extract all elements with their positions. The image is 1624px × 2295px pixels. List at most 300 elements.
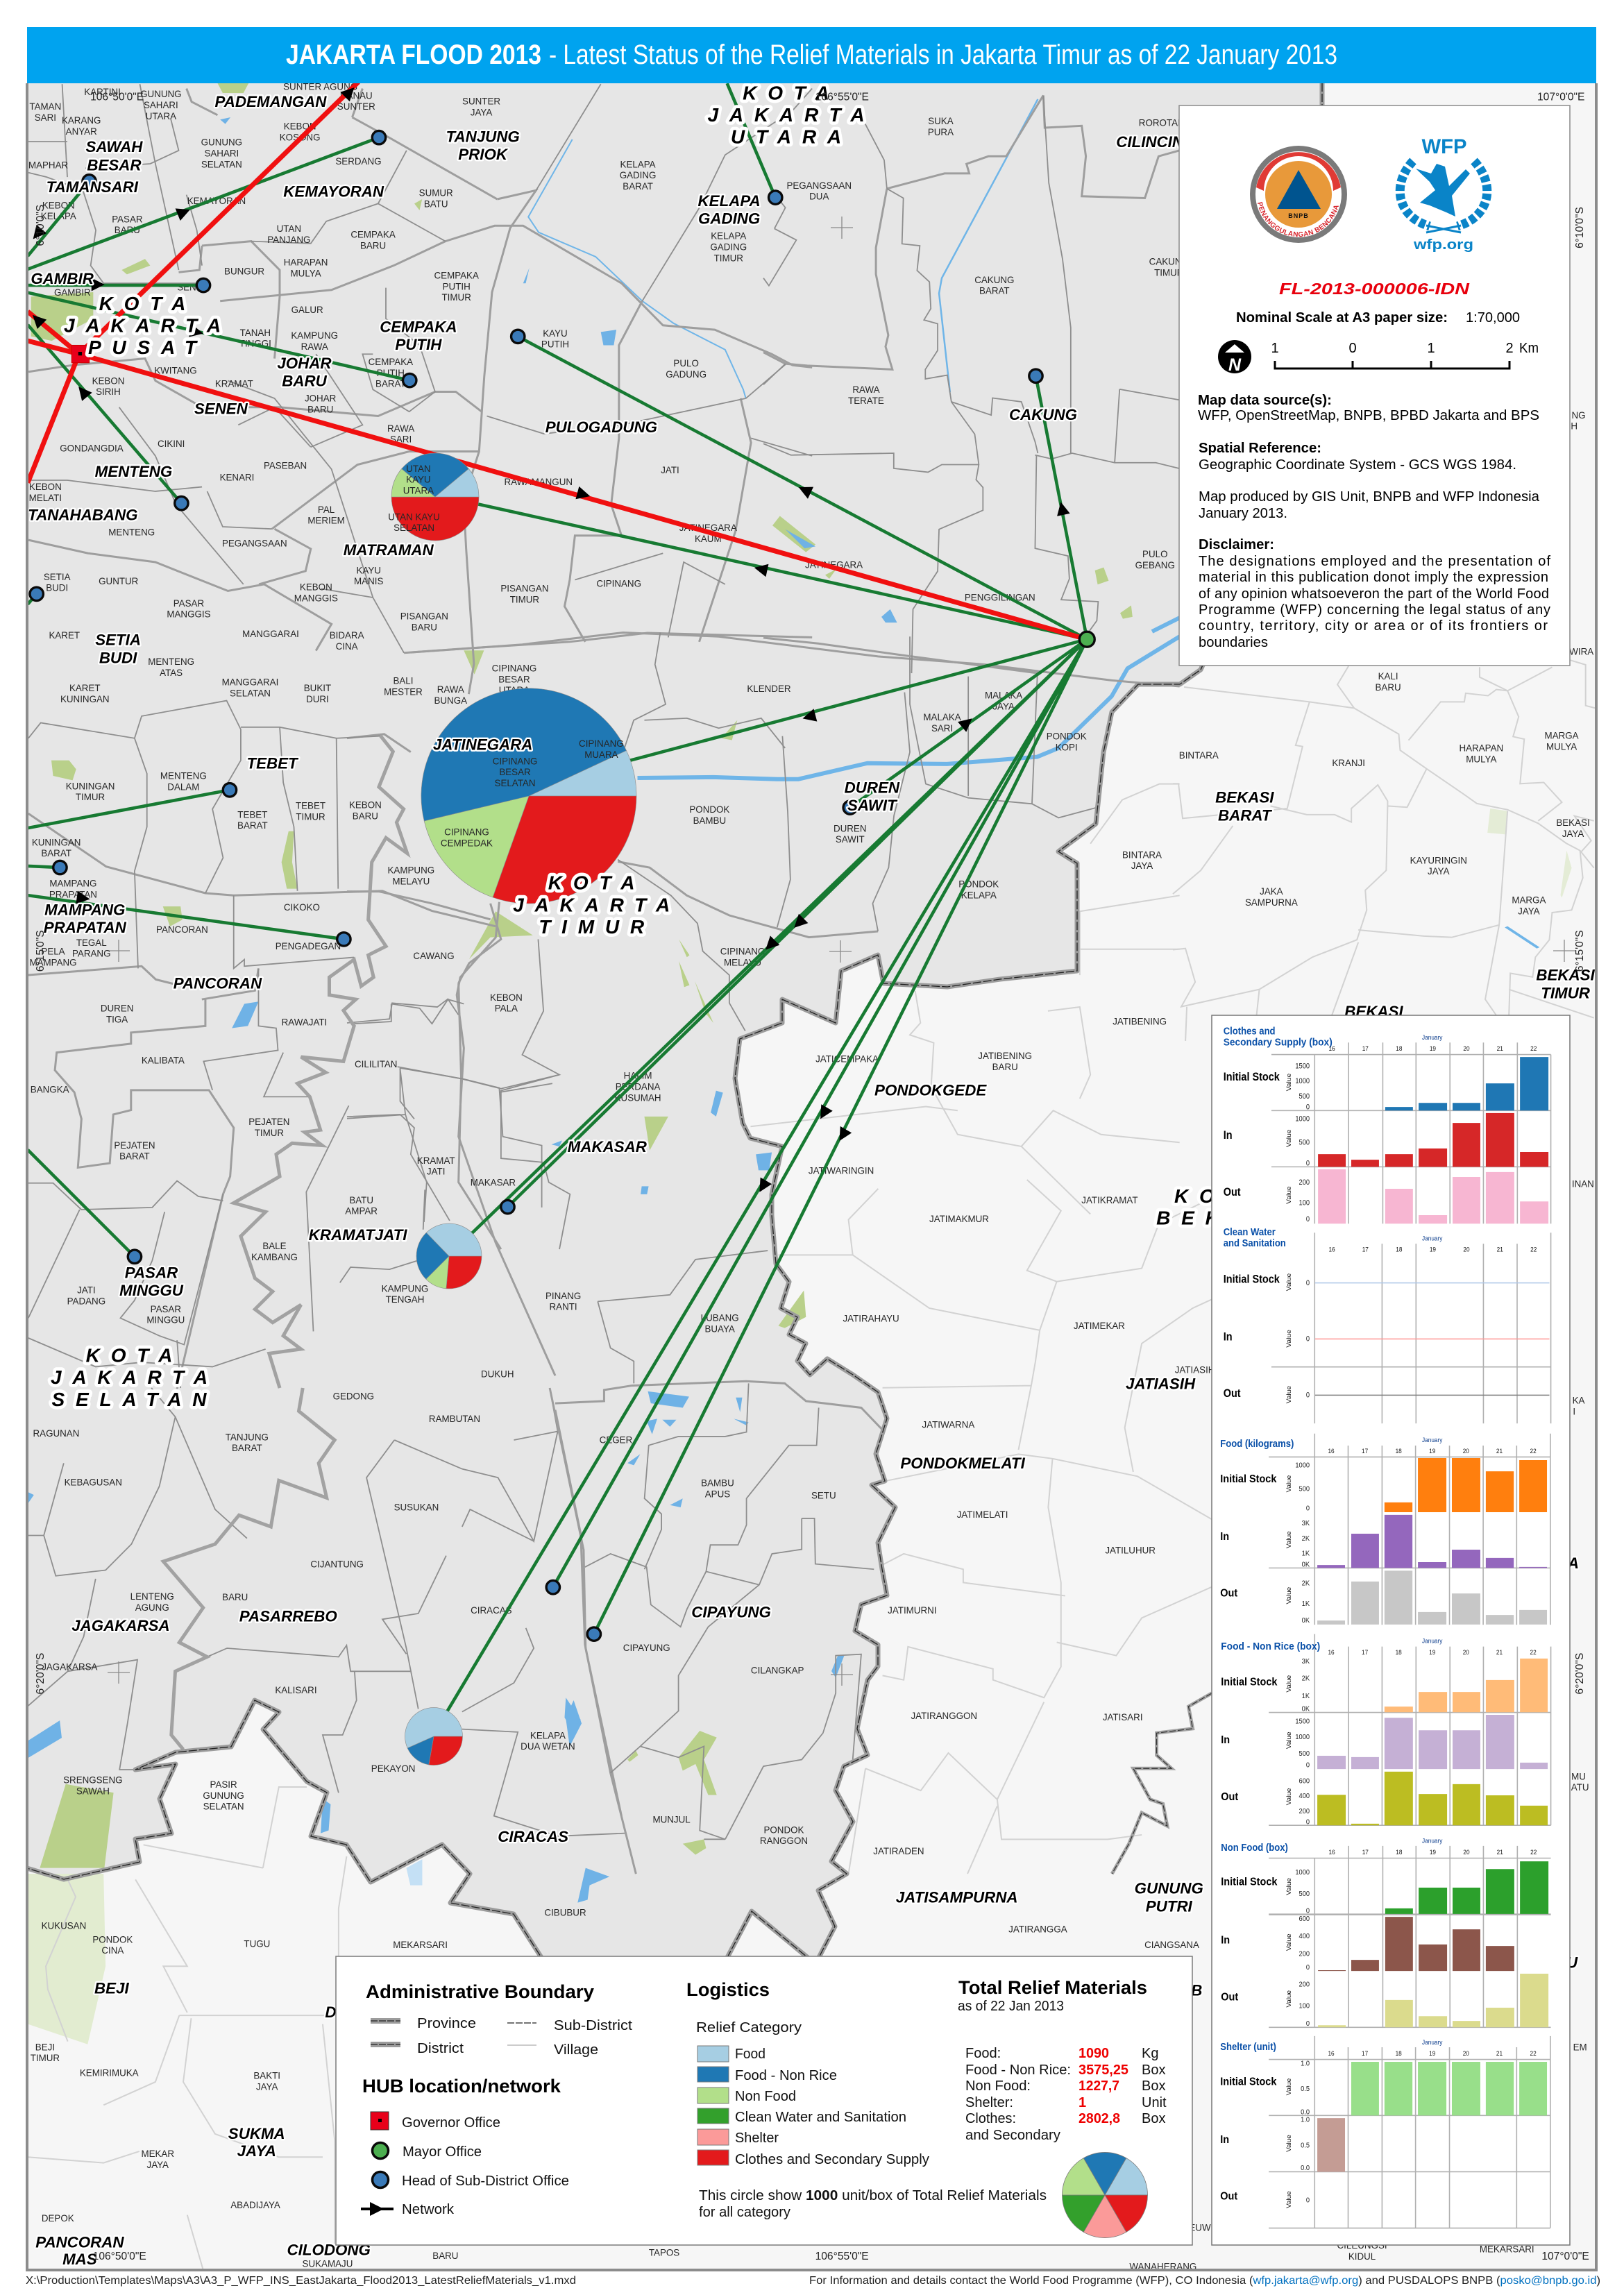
network: village labels: TAPOS [649, 2248, 679, 2258]
network: village labels: TUGU [244, 1939, 270, 1949]
network: village labels: BANGKA [31, 1085, 69, 1095]
network: village labels: CAWANG [413, 951, 455, 961]
chart: clean water and sanitation: 0 [1306, 1391, 1310, 1400]
chart: non food (box): Non Food (box) [1221, 1841, 1288, 1853]
network: village labels: CIRACAS [471, 1605, 512, 1616]
graticule coordinate labels: 6°10'0"S [35, 205, 46, 246]
pie chart: Matraman (Utan Kayu) [391, 453, 479, 541]
district labels: A [1567, 1555, 1579, 1572]
network: village labels: MELAYU [724, 957, 761, 967]
chart: non food (box): 22 [1530, 1848, 1537, 1856]
network: village labels: MINGGU [146, 1315, 185, 1326]
network: village labels: PEJATEN [248, 1117, 289, 1127]
network: village labels: JAYA [1428, 866, 1450, 876]
bars: food in [1317, 1515, 1547, 1568]
network: village labels: KUNINGAN [60, 694, 110, 704]
chart: food (kilograms): Food (kilograms) [1220, 1437, 1294, 1449]
bars: non food in [1318, 1917, 1514, 1971]
chart: clean water and sanitation: Initial Stock [1224, 1273, 1280, 1286]
network: village labels: H [1571, 421, 1578, 432]
chart: shelter (unit): Value [1286, 2078, 1293, 2095]
network: village labels: CIPINANG [720, 946, 765, 956]
network: village labels: PONDOK [689, 804, 729, 815]
title bar: JAKARTA FLOOD 2013 [286, 40, 541, 70]
legend: total relief materials: 1 [1079, 2095, 1086, 2110]
network: village labels: KARET [49, 630, 80, 641]
district labels: TAMANSARI [46, 178, 139, 196]
scale bar: 1 [1271, 341, 1279, 356]
map: parks in Bekasi [1487, 808, 1572, 949]
map: province boundary line [27, 83, 1322, 1964]
network: village labels: I [1573, 1406, 1575, 1416]
village labels on pies: CIPINANG [493, 756, 537, 766]
chart: food non rice (box): 1000 [1295, 1734, 1310, 1741]
legend: HUB location and network [361, 2076, 569, 2217]
network: village labels: DALAM [167, 781, 199, 792]
network: village labels: BUDI [46, 583, 68, 593]
network: village labels: KELAPA [620, 159, 656, 169]
network: village labels: RAGUNAN [33, 1428, 79, 1439]
chart: clean water and sanitation: 22 [1530, 1246, 1537, 1253]
pie chart: Pekayon [405, 1707, 462, 1765]
village labels on pies: CIPINANG [579, 738, 624, 749]
network: village labels: AGUNG [135, 1602, 169, 1613]
district labels: MENTENG [95, 463, 172, 480]
map: rivers and canals [528, 99, 1249, 779]
network: village labels: CIKINI [158, 439, 185, 449]
text: map data source [1198, 393, 1539, 423]
legend: total relief materials: 1227,7 [1079, 2078, 1119, 2094]
text: disclaimer: country, territory, city or area or of its frontiers or [1199, 618, 1548, 634]
network: village labels: MENTENG [148, 657, 194, 667]
network: village labels: EM [1573, 2042, 1587, 2052]
network: village labels: GADING [620, 170, 656, 180]
network: village labels: SARI [390, 434, 412, 445]
network: village labels: MEKARSARI [393, 1940, 448, 1950]
network: village labels: SERDANG [335, 156, 382, 167]
chart: non food (box): 500 [1299, 1890, 1310, 1898]
chart: non food (box): 600 [1299, 1915, 1310, 1923]
chart: food non rice (box): 2K [1302, 1675, 1310, 1683]
network: village labels: MAKASAR [471, 1178, 516, 1188]
network: village labels: BUNGA [434, 695, 467, 706]
chart: food non rice (box): Out [1221, 1790, 1238, 1803]
network: village labels: PASIR [210, 1779, 237, 1790]
network: village labels: TANJUNG [226, 1432, 269, 1442]
network: village labels: DUA [809, 192, 829, 202]
network: village labels: RANGGON [760, 1836, 808, 1846]
network: village labels: JATIWARNA [922, 1419, 974, 1430]
district labels: CIPAYUNG [691, 1603, 771, 1620]
chart: clothes and secondary supply: 21 [1497, 1045, 1503, 1052]
village labels on pies: KAYU [406, 475, 431, 485]
text: disclaimer: boundaries [1199, 635, 1268, 650]
district labels: PANCORAN [35, 2233, 124, 2251]
title bar [27, 27, 1596, 83]
network: village labels: ATU [1571, 1782, 1589, 1793]
village labels on pies: UTAN KAYU [388, 511, 440, 522]
chart: food non rice (box): Value [1286, 1675, 1293, 1693]
district labels: JAGAKARSA [71, 1617, 170, 1634]
city (Kota) labels: JAKARTA [707, 104, 875, 126]
network: village labels: MALAKA [923, 712, 961, 722]
network: village labels: PASAR [151, 1304, 181, 1314]
network: village labels: BUAYA [704, 1323, 735, 1334]
panel: stock charts [1212, 1015, 1570, 2245]
network: village labels: KARET [69, 683, 101, 693]
chart: non food (box): 20 [1463, 1848, 1470, 1856]
network: village labels: JATIRAHAYU [843, 1314, 899, 1324]
map: graticule crosses [108, 217, 1575, 1686]
network: village labels: TERATE [848, 396, 884, 406]
text: map producer: Map produced by GIS Unit, BNPB and WFP Indonesia [1199, 489, 1540, 505]
network: village labels: TANAH [240, 328, 271, 338]
district labels: MAKASAR [568, 1138, 647, 1155]
network: village labels: CIANGSANA [1144, 1940, 1199, 1950]
network: village labels: RANTI [550, 1302, 577, 1312]
network: village labels: RAWAMANGUN [504, 477, 573, 487]
network: village labels: KA [1573, 1396, 1584, 1406]
network: village labels: MENTENG [108, 527, 155, 538]
scale bar: Km [1519, 341, 1539, 356]
district labels: PRIOK [458, 146, 509, 163]
bars: food initial stock [1385, 1458, 1547, 1512]
network: village labels: KRAMAT [417, 1155, 455, 1166]
legend: circle note [699, 2188, 1047, 2220]
network: village labels: JATILUHUR [1105, 1545, 1156, 1556]
district labels: KELAPA [698, 192, 761, 210]
network: village labels: AMPAR [345, 1206, 378, 1217]
chart: clean water and sanitation: Value [1286, 1330, 1293, 1348]
network: village labels: HARAPAN [284, 257, 328, 268]
network: village labels: MU [1571, 1771, 1586, 1781]
network: village labels: JAYA [1131, 861, 1153, 871]
village labels on pies: UTAN [406, 464, 431, 474]
network: village labels: DUA WETAN [521, 1741, 575, 1752]
network: village labels: CAKUNG [974, 275, 1014, 285]
network: village labels: SUNTER AGUNG [283, 82, 357, 92]
legend: logistics relief categories: Logistics [686, 1979, 770, 2000]
network: village labels: BESAR [498, 674, 530, 684]
district labels: SENEN [194, 400, 248, 418]
district labels: CIRACAS [498, 1828, 568, 1845]
chart: clean water and sanitation: Value [1286, 1386, 1293, 1403]
network: village labels: KENARI [220, 472, 254, 482]
network: village labels: UTARA [499, 685, 530, 695]
chart: food (kilograms): 0K [1302, 1561, 1310, 1569]
network: village labels: WIRA [1569, 646, 1593, 657]
text: disclaimer: Disclaimer: [1199, 537, 1274, 552]
network: village labels: BARAT [237, 820, 268, 831]
district labels: BARAT [1218, 807, 1273, 824]
network: village labels: TIGA [106, 1014, 128, 1024]
network: village labels: BARU [353, 811, 378, 821]
network: village labels: APUS [705, 1489, 730, 1500]
legend: total relief materials: Non Food: [965, 2078, 1031, 2094]
district labels: JATIASIH [1126, 1375, 1196, 1392]
network: village labels: GALUR [291, 305, 323, 315]
network: village labels: BARAT [119, 1151, 150, 1162]
district labels: BESAR [87, 156, 142, 173]
network: village labels: KELAPA [961, 890, 997, 900]
chart: food (kilograms): Out [1220, 1587, 1237, 1600]
district labels: PUTRI [1146, 1898, 1193, 1915]
network: village labels: GAMBIR [54, 287, 91, 298]
network: village labels: CIJANTUNG [310, 1559, 364, 1570]
legend: administrative boundary: District [417, 2041, 464, 2056]
network: village labels: SENEN [177, 282, 209, 292]
chart: clean water and sanitation: 19 [1430, 1246, 1436, 1253]
network: village labels: KUNINGAN [66, 781, 115, 791]
district labels: SETIA [95, 632, 141, 649]
network: village labels: JAYA [1518, 906, 1540, 917]
text: map producer [1199, 489, 1540, 521]
text: disclaimer: material in this publication donot imply the expression [1199, 570, 1548, 585]
map: boundaries centre [347, 632, 1180, 1249]
network: village labels: SUNTER [337, 101, 375, 112]
text: map producer: January 2013. [1199, 506, 1287, 521]
chart: clothes and secondary supply: 22 [1530, 1045, 1537, 1052]
network: village labels: JAYA [471, 108, 492, 118]
district labels: KRAMATJATI [309, 1226, 407, 1244]
network: village labels: MESTER [384, 686, 423, 697]
network: village labels: ANYAR [66, 126, 97, 137]
network: village labels: HARAPAN [1460, 743, 1503, 753]
chart: shelter (unit): 0.0 [1301, 2165, 1310, 2172]
graticule coordinate labels: 6°20'0"S [1574, 1653, 1586, 1694]
logo: WFP [1400, 135, 1487, 253]
chart: non food (box): 1000 [1295, 1869, 1310, 1877]
chart: non food (box): 17 [1362, 1848, 1369, 1856]
chart: non food (box): 21 [1497, 1848, 1503, 1856]
chart: clothes and secondary supply: Out [1224, 1186, 1241, 1199]
footer: file path: X:\Production\Templates\Maps\A3\A3_P_WFP_INS_EastJakarta_Flood2013_LatestReliefMaterials_v1.mxd [26, 2275, 576, 2287]
district labels: SAWAH [85, 138, 142, 155]
network: village labels: SRENGSENG [63, 1775, 123, 1786]
district labels: U [1566, 1954, 1578, 1971]
network: village labels: MARGA [1545, 731, 1579, 741]
text: disclaimer [1199, 537, 1550, 650]
chart: non food (box): 0 [1306, 1907, 1310, 1915]
legend: HUB location and network: Governor Office [402, 2115, 500, 2131]
network: village labels: KAYU [543, 328, 568, 339]
network: village labels: ATAS [160, 668, 183, 678]
network: village labels: KUNINGAN [32, 837, 81, 847]
map: boundaries east Bekasi [1173, 660, 1596, 1041]
network: village labels: BARU [412, 623, 437, 633]
network: village labels: BARAT [979, 286, 1010, 296]
network: village labels: JAYA [1562, 829, 1584, 839]
chart: food non rice (box): 19 [1429, 1648, 1435, 1656]
logo: BNPB: PENANGGULANGAN BENCANA [1258, 202, 1339, 237]
network: village labels: KAUM [695, 534, 722, 544]
network: village labels: GUNTUR [99, 576, 139, 586]
network: village labels: JATINEGARA [679, 523, 737, 533]
network: village labels: PENGADEGAN [276, 941, 341, 951]
network: village labels: SELATAN [201, 159, 242, 169]
network: village labels: JATIBENING [1113, 1017, 1167, 1027]
legend: administrative boundary: Administrative Boundary [366, 1981, 594, 2002]
network: village labels: KOPI [1056, 742, 1078, 752]
network: village labels: MULYA [1546, 741, 1577, 752]
network: village labels: BATU [424, 198, 448, 209]
chart: clean water and sanitation: 0 [1306, 1279, 1310, 1287]
village labels on pies: SELATAN [495, 778, 536, 788]
chart: clean water and sanitation: 0 [1306, 1335, 1310, 1344]
village labels on pies: CIPINANG [444, 827, 489, 838]
network: village labels: PONDOK [958, 879, 999, 890]
network: village labels: PADANG [67, 1296, 105, 1306]
nominal scale: Nominal Scale at A3 paper size: [1236, 310, 1448, 325]
network: village labels: PUTIH [443, 281, 471, 291]
network: village labels: MULYA [1466, 754, 1496, 764]
network: head of sub-district office markers [30, 130, 1042, 1641]
network: governor routes (red) [28, 82, 1087, 639]
network: village labels: BALE [262, 1241, 287, 1251]
chart: non food (box): In [1221, 1934, 1230, 1947]
chart: shelter (unit): 19 [1429, 2049, 1435, 2057]
network: village labels: CILEUNGSI [1337, 2240, 1387, 2251]
map: parks and lakes, Cipayung [564, 1290, 844, 1855]
text: disclaimer: The designations employed and the presentation of [1199, 554, 1550, 569]
chart: food non rice (box): In [1221, 1734, 1230, 1746]
chart: food non rice (box): Initial Stock [1221, 1676, 1278, 1688]
network: village labels: GUNUNG [203, 1790, 244, 1801]
map: boundaries north-east [763, 95, 1179, 673]
chart: food non rice (box): January [1422, 1637, 1443, 1645]
title bar: - Latest Status of the Relief Materials in Jakarta Timur as of 22 January 2013 [549, 40, 1337, 70]
district labels: CILODONG [287, 2241, 371, 2258]
network: village labels: SAWAH [76, 1786, 110, 1796]
scale bar: 0 [1348, 341, 1357, 356]
chart: clothes and secondary supply: 100 [1299, 1199, 1310, 1208]
chart: non food (box): 100 [1299, 2002, 1310, 2010]
network: village labels: RAWA [387, 423, 414, 434]
chart: clothes and secondary supply: Value [1286, 1186, 1293, 1204]
graticule coordinate labels: 106°55'0"E [815, 91, 869, 103]
scale bar [1271, 341, 1539, 369]
map code: FL-2013-000006-IDN [1279, 280, 1469, 298]
network: village labels: DUKUH [481, 1369, 514, 1380]
network: village labels: GEBANG [1135, 560, 1175, 570]
chart: clean water and sanitation: 20 [1463, 1246, 1470, 1253]
network: village labels: ABADIJAYA [230, 2200, 280, 2210]
network: village labels: ROROTAN [1139, 117, 1185, 128]
text: disclaimer: Programme (WFP) concerning the legal status of any [1199, 602, 1550, 618]
network: village labels: CINA [336, 641, 358, 652]
chart: food (kilograms): 16 [1328, 1448, 1335, 1455]
text: map data source: Map data source(s): [1198, 393, 1332, 408]
network: village labels: KAMBANG [251, 1252, 298, 1262]
chart: clean water and sanitation: Clean Water [1224, 1226, 1276, 1237]
district labels: CAKUNG [1009, 406, 1077, 423]
network: village labels: MANGGARAI [242, 629, 299, 639]
network: village labels: PULO [1142, 549, 1167, 559]
legend: total relief materials: Box [1142, 2111, 1165, 2126]
text: map data source: WFP, OpenStreetMap, BNPB, BPBD Jakarta and BPS [1198, 408, 1539, 423]
chart: clean water and sanitation: In [1224, 1330, 1233, 1344]
district labels: MAS [62, 2251, 97, 2268]
chart: clothes and secondary supply: 17 [1362, 1045, 1369, 1052]
network: village labels: CIBUBUR [544, 1907, 586, 1917]
network: village labels: GEDONG [333, 1391, 374, 1401]
network: village labels: LUBANG [701, 1313, 739, 1323]
city (Kota) labels: PUSAT [88, 337, 208, 358]
chart: shelter (unit): 20 [1463, 2049, 1469, 2057]
network: village labels: RAWA [852, 384, 880, 395]
village labels on pies: UTARA [403, 485, 434, 496]
network: supply routes (green) [28, 83, 1087, 1735]
network: governor office marker [71, 345, 90, 363]
chart: food non rice (box): 200 [1299, 1808, 1310, 1815]
network: village labels: JOHAR [305, 393, 336, 404]
chart: clean water and sanitation [1224, 1226, 1551, 1423]
network: village labels: GUNUNG [140, 89, 182, 99]
chart: clothes and secondary supply: 500 [1299, 1092, 1310, 1101]
legend: total relief materials: Total Relief Materials [958, 1977, 1147, 1998]
scale bar: 1 [1427, 341, 1435, 356]
legend: logistics relief categories: Relief Category [696, 2020, 802, 2035]
network: village labels: BARU [307, 404, 333, 414]
chart: shelter (unit): In [1220, 2133, 1229, 2146]
district labels: PADEMANGAN [215, 93, 327, 110]
network: village labels: KALI [1378, 671, 1398, 681]
network: village labels: JATIBENING [978, 1051, 1032, 1061]
network: village labels: PONDOK [92, 1934, 133, 1945]
legend: administrative boundary: Village [554, 2042, 598, 2058]
network: village labels: DURI [306, 694, 329, 704]
network: village labels: UTAN [277, 223, 301, 234]
chart: shelter (unit): 0 [1306, 2196, 1310, 2205]
network: village labels: KEMAYORAN [187, 196, 246, 206]
legend: total relief materials: 1090 [1079, 2046, 1109, 2061]
network: village labels: MERIEM [307, 516, 345, 526]
legend: HUB location and network: Mayor Office [403, 2144, 482, 2160]
chart: shelter (unit): Value [1286, 2191, 1293, 2208]
network: village labels: PISANGAN [500, 584, 548, 594]
chart: shelter (unit): Initial Stock [1220, 2076, 1277, 2088]
network: village labels: TAMAN [29, 101, 61, 112]
network: direction arrows [28, 83, 1070, 1196]
chart: non food (box): 0 [1306, 1963, 1310, 1972]
chart: clothes and secondary supply: 20 [1463, 1045, 1470, 1052]
network: village labels: MALAKA [985, 691, 1022, 701]
network: village labels: JATICEMPAKA [815, 1053, 879, 1064]
chart: non food (box): 200 [1299, 1981, 1310, 1989]
legend: total relief materials: Box [1142, 2078, 1165, 2094]
chart: clean water and sanitation: 21 [1497, 1246, 1503, 1253]
network: village labels: TIMUR [76, 792, 105, 802]
network: village labels: BARU [1375, 682, 1401, 693]
district labels: PONDOKMELATI [900, 1455, 1026, 1472]
chart: food non rice (box): 18 [1396, 1648, 1402, 1656]
chart: food (kilograms): January [1422, 1437, 1443, 1443]
village labels on pies: BESAR [499, 767, 531, 777]
network: village labels: PASAR [112, 214, 143, 224]
chart: clothes and secondary supply: Clothes and [1224, 1024, 1276, 1037]
network: village labels: MENTENG [160, 771, 207, 781]
network: village labels: BALI [393, 675, 413, 686]
chart: shelter (unit): 0.5 [1301, 2085, 1310, 2093]
network: village labels: PELA [41, 946, 65, 956]
chart: non food (box) [1221, 1837, 1551, 2028]
chart: food non rice (box): Value [1286, 1788, 1293, 1805]
map: boundaries south-west [28, 701, 555, 1389]
chart: clothes and secondary supply: Value [1286, 1129, 1293, 1147]
district labels: PASAR [125, 1264, 178, 1282]
logo: WFP: wfp.org [1413, 237, 1473, 253]
logo: BNPB: BNPB [1288, 212, 1309, 219]
